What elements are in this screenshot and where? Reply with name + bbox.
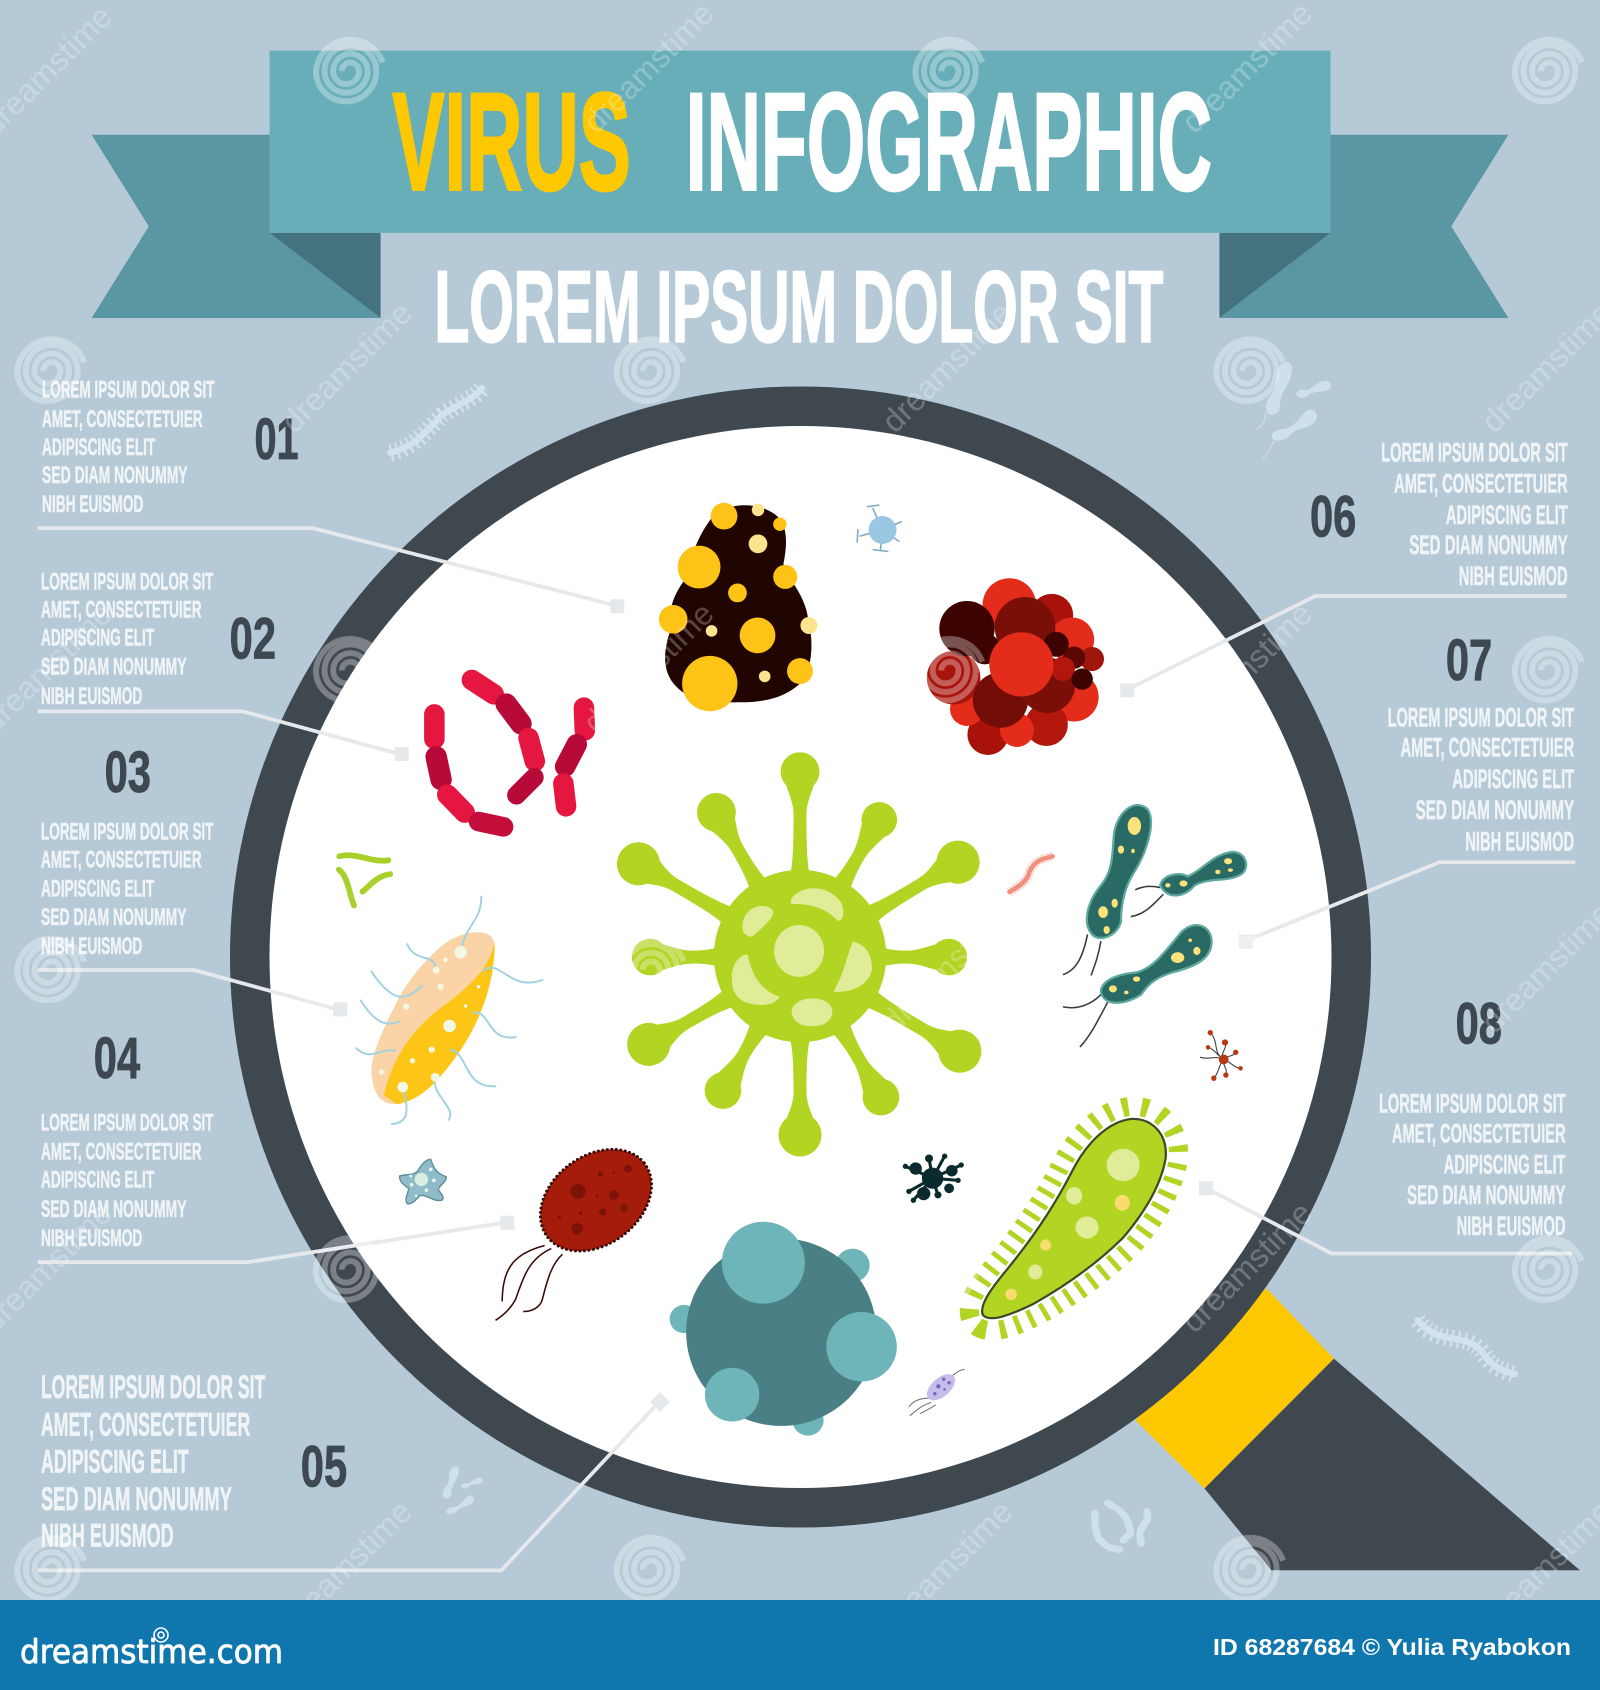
watermark text: dreamstime (1174, 595, 1319, 740)
footer background (0, 1600, 1600, 1690)
text block 07 (1388, 702, 1574, 856)
text blocks and numbers (41, 378, 1574, 1554)
lens ring (230, 386, 1371, 1528)
leader 06 (1120, 596, 1567, 697)
ribbon right fold (1219, 233, 1330, 318)
leader 03 (38, 970, 347, 1016)
text block 02: ADIPISCING ELIT (41, 626, 154, 652)
watermark text: dreamstime (576, 595, 721, 740)
text block 01 (42, 378, 215, 518)
title (392, 65, 1212, 220)
organism: small red star microbe (1200, 1030, 1243, 1081)
watermark text: dreamstime (274, 1493, 419, 1638)
number 08: 08 (1456, 991, 1502, 1056)
number 04: 04 (94, 1026, 141, 1091)
handle grip (1204, 1359, 1580, 1570)
text block 06 (1381, 437, 1568, 591)
ribbon right tail (1219, 135, 1508, 318)
text block 03: ADIPISCING ELIT (41, 877, 154, 903)
text block 04: NIBH EUISMOD (41, 1226, 142, 1252)
number 03: 03 (105, 740, 151, 805)
watermark text: dreamstime (874, 1493, 1019, 1638)
leader lines (38, 528, 1575, 1570)
title word virus: VIRUS (392, 65, 631, 220)
leader 01 (38, 528, 624, 613)
magnifying glass lens (230, 386, 1371, 1528)
organisms upper left (339, 503, 902, 1126)
text block 02 (41, 570, 214, 710)
text block 01: ADIPISCING ELIT (42, 435, 156, 461)
organism: pink worm (1009, 856, 1053, 892)
leader 04 (38, 1216, 514, 1262)
virus inner patches (732, 888, 872, 1026)
organism: red oval germ (496, 1128, 672, 1320)
number 06: 06 (1310, 485, 1356, 550)
ribbon left fold (270, 233, 381, 318)
organism: green paramecium (982, 1119, 1166, 1318)
organism: small black virus (903, 1154, 964, 1203)
leader 07 (1239, 862, 1575, 948)
banner ribbon (92, 51, 1508, 318)
text block 04: ADIPISCING ELIT (41, 1168, 154, 1194)
text block 02: LOREM IPSUM DOLOR SIT (41, 570, 214, 596)
text block 02: SED DIAM NONUMMY (41, 655, 187, 681)
organisms upper right (927, 578, 1246, 1081)
organism: blue star amoeba (400, 1159, 446, 1204)
text block 05: AMET, CONSECTETUIER (41, 1407, 250, 1443)
text block 01: LOREM IPSUM DOLOR SIT (42, 378, 215, 404)
organism: small blue virus (857, 505, 902, 551)
text block 01: SED DIAM NONUMMY (42, 463, 188, 489)
text block 05: SED DIAM NONUMMY (41, 1481, 232, 1517)
text block 04: SED DIAM NONUMMY (41, 1197, 187, 1223)
organisms lower right (903, 1119, 1166, 1416)
text block 04: LOREM IPSUM DOLOR SIT (41, 1111, 214, 1137)
virus spikes (609, 752, 989, 1156)
faint decorative microbes on background (390, 362, 1515, 1550)
text block 03: LOREM IPSUM DOLOR SIT (41, 820, 214, 846)
footer credit: ID 68287684 © Yulia Ryabokon (1213, 1634, 1571, 1660)
organism: teal flagellates (1063, 805, 1246, 1047)
text block 05: NIBH EUISMOD (41, 1518, 174, 1554)
watermark text: dreamstime (576, 1194, 721, 1339)
text block 04 (41, 1111, 214, 1252)
organism: brown spotted blob (659, 503, 817, 711)
number 05: 05 (301, 1434, 347, 1499)
handle yellow collar (1135, 1288, 1334, 1488)
ribbon left tail (92, 135, 381, 318)
text block 03 (41, 820, 214, 960)
watermark text: dreamstime (274, 895, 419, 1040)
text block 02: NIBH EUISMOD (41, 684, 142, 710)
footer logo text: dreamstime.com (20, 1632, 283, 1671)
organism: teal sphere virus (670, 1222, 897, 1436)
organism: central green virus (609, 752, 989, 1156)
organism: small purple germ (909, 1369, 965, 1416)
text block 03: SED DIAM NONUMMY (41, 905, 187, 931)
watermark text: dreamstime (274, 294, 419, 439)
number 01: 01 (254, 407, 299, 472)
number 02: 02 (230, 607, 276, 672)
text block 02: AMET, CONSECTETUIER (41, 598, 202, 624)
organisms lower left (400, 1128, 897, 1436)
footer logo spiral (154, 1628, 168, 1642)
organism: red chain bacteria (434, 680, 585, 827)
text block 03: AMET, CONSECTETUIER (41, 848, 202, 874)
text block 03: NIBH EUISMOD (41, 934, 142, 960)
watermark text: dreamstime (1174, 1194, 1319, 1339)
leader 05 (38, 1392, 670, 1570)
ribbon main band (270, 51, 1330, 233)
text block 05 (41, 1369, 265, 1554)
text block 05: LOREM IPSUM DOLOR SIT (41, 1369, 265, 1405)
watermark text: dreamstime (874, 895, 1019, 1040)
leader 02 (38, 711, 409, 761)
leader 08 (1199, 1181, 1572, 1253)
footer bar (0, 1600, 1600, 1690)
organism: tiny green worms (339, 855, 390, 905)
organism: yellow oval bacterium (356, 896, 542, 1126)
text block 08 (1379, 1088, 1566, 1241)
magnifying glass handle (1135, 1288, 1580, 1570)
text block 01: AMET, CONSECTETUIER (42, 407, 203, 433)
lens interior (270, 426, 1332, 1488)
watermark text: dreamstime (874, 294, 1019, 439)
text block 05: ADIPISCING ELIT (41, 1443, 189, 1479)
text block 01: NIBH EUISMOD (42, 492, 143, 518)
organism: red cell cluster (927, 578, 1104, 755)
text block 04: AMET, CONSECTETUIER (41, 1140, 202, 1166)
number 07: 07 (1446, 628, 1492, 693)
